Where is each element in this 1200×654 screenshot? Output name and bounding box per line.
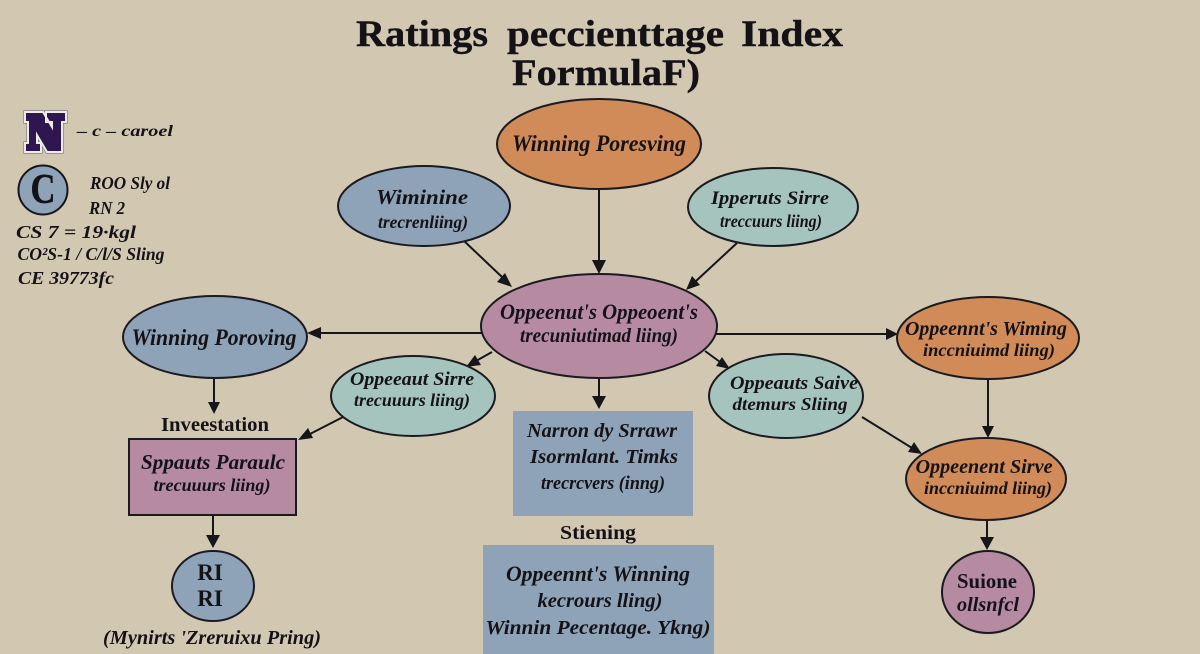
node: right teal ellipse: dtemurs Sliing bbox=[732, 394, 848, 414]
title: peccienttage bbox=[507, 14, 724, 55]
box: bottom blue rectangle bbox=[483, 545, 714, 654]
box: bottom blue rectangle: Oppeennt's Winning bbox=[506, 561, 690, 586]
box: center blue rectangle: Isormlant. Timks bbox=[529, 446, 678, 468]
legend text lines: CO²S-1 / C/l/S Sling bbox=[18, 244, 164, 264]
node: Suione circle: Suione bbox=[957, 569, 1017, 593]
box: center blue rectangle bbox=[513, 411, 693, 516]
title: FormulaF) bbox=[512, 53, 700, 94]
node: upper left blue ellipse: trecrenliing) bbox=[378, 212, 468, 233]
node: left blue ellipse bbox=[123, 296, 307, 378]
icon: C circle: C bbox=[30, 167, 56, 213]
node: left teal ellipse: trecuuurs liing) bbox=[354, 390, 470, 411]
arrows bbox=[206, 188, 994, 550]
title bbox=[356, 14, 844, 94]
node: upper right teal ellipse: Ipperuts Sirre bbox=[710, 188, 830, 209]
box: bottom blue rectangle: kecrours lling) bbox=[538, 590, 662, 612]
title: Index bbox=[741, 14, 844, 55]
node: left teal ellipse bbox=[331, 356, 495, 436]
node: left blue ellipse: Winning Poroving bbox=[132, 325, 296, 350]
node: top orange ellipse: Winning Poresving bbox=[512, 131, 686, 156]
box: mauve rectangle: trecuuurs liing) bbox=[154, 475, 270, 496]
node: upper right teal ellipse bbox=[688, 168, 858, 246]
node: RI circle bbox=[172, 551, 254, 621]
node: upper right teal ellipse: treccuurs liing) bbox=[720, 211, 822, 232]
node: lower right orange ellipse: inccniuimd liing) bbox=[924, 478, 1052, 499]
node: central mauve ellipse: trecuniutimad liing) bbox=[520, 325, 678, 347]
box: mauve rectangle: Sppauts Paraulc bbox=[141, 450, 286, 474]
box: mauve rectangle bbox=[129, 439, 296, 515]
node: right orange ellipse bbox=[897, 297, 1079, 379]
node: lower right orange ellipse bbox=[906, 438, 1066, 520]
node: Suione circle: ollsnfcl bbox=[957, 594, 1019, 616]
node: right orange ellipse: Oppeennt's Wiming bbox=[905, 318, 1067, 340]
legend bbox=[16, 112, 174, 288]
icon: C circle bbox=[18, 166, 68, 214]
legend text lines: RN 2 bbox=[88, 198, 125, 218]
node: upper left blue ellipse: Wiminine bbox=[376, 185, 468, 209]
heading: Stiening: Stiening bbox=[560, 522, 636, 544]
legend text lines: CS 7 = 19·kgl bbox=[16, 222, 136, 242]
title: Ratings bbox=[356, 14, 488, 55]
node: central mauve ellipse: Oppeenut's Oppeoent's bbox=[500, 299, 698, 324]
legend text lines: CE 39773fc bbox=[18, 268, 114, 288]
caption: RI: (Mynirts 'Zreruixu Pring) bbox=[103, 627, 321, 649]
heading: Investation: Inveestation bbox=[161, 414, 269, 436]
node: right teal ellipse: Oppeauts Saive bbox=[730, 373, 859, 394]
node: upper left blue ellipse bbox=[338, 166, 510, 246]
legend text: N key: – c – caroel bbox=[76, 123, 174, 140]
node: RI circle: RI bbox=[197, 586, 223, 611]
box: bottom blue rectangle: Winnin Pecentage. Ykng) bbox=[486, 617, 710, 639]
icon: N logo bbox=[25, 112, 66, 152]
legend text lines: ROO Sly ol bbox=[89, 173, 170, 193]
node: right teal ellipse bbox=[709, 354, 863, 438]
legend text lines bbox=[16, 173, 170, 288]
box: center blue rectangle: Narron dy Srrawr bbox=[526, 420, 677, 442]
node: lower right orange ellipse: Oppeenent Sirve bbox=[916, 456, 1053, 478]
box: center blue rectangle: trecrcvers (inng) bbox=[541, 473, 665, 494]
node: right orange ellipse: inccniuimd liing) bbox=[923, 340, 1055, 361]
node: central mauve ellipse bbox=[481, 274, 717, 378]
node: RI circle: RI bbox=[197, 560, 223, 585]
node: Suione circle bbox=[942, 551, 1034, 633]
node: top orange ellipse bbox=[497, 99, 701, 189]
node: left teal ellipse: Oppeeaut Sirre bbox=[350, 369, 475, 390]
